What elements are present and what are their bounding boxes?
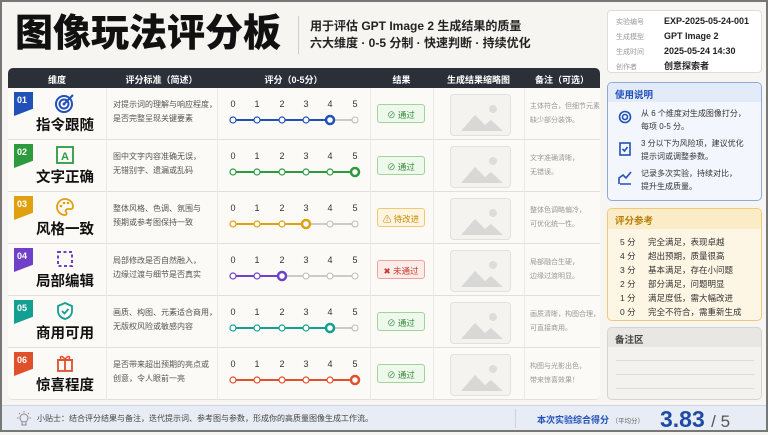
table header: 备注（可选） [535, 75, 589, 85]
row 2: 02 [17, 147, 27, 157]
panel: scoring reference: 4 分 [620, 251, 636, 261]
row 2: 无错误。 [530, 169, 558, 176]
panel: scoring reference: 2 分 [620, 279, 636, 289]
subtitle: 六大维度 · 0-5 分制 · 快速判断 · 持续优化 [310, 36, 531, 50]
title: 图像玩法评分板 [15, 13, 281, 55]
panel: usage: 3 分以下为风险项，建议优化 [641, 139, 744, 148]
row 6: 是否带来超出预期的亮点或 [113, 360, 209, 369]
panel: notes: 备注区 [615, 335, 644, 346]
row 4: 0 [230, 255, 236, 265]
row 4 [8, 244, 600, 296]
row 4: 5 [352, 255, 358, 265]
row 4: 边缘过渡与细节是否真实 [113, 270, 201, 279]
info box: 创意探索者 [664, 61, 709, 71]
info box: 实验编号 [616, 19, 644, 26]
row 5: 画质清晰，构图合理， [530, 311, 600, 318]
info box: 2025-05-24 14:30 [664, 46, 736, 56]
row 2: 图中文字内容准确无误， [113, 152, 201, 161]
row 3: 03 [17, 199, 27, 209]
row 2: ⊘ 通过 [387, 162, 415, 172]
info box: 生成时间 [616, 49, 644, 56]
row 1: 指令跟随 [36, 118, 94, 134]
row 4: 04 [17, 251, 27, 261]
row 4: 3 [303, 255, 309, 265]
row 6: 惊喜程度 [36, 378, 94, 394]
subtitle: 用于评估 GPT Image 2 生成结果的质量 [310, 19, 521, 33]
tip text: 小贴士：结合评分结果与备注，迭代提示词、参考图与参数，形成你的高质量图像生成工作流。 [37, 414, 373, 423]
row 2: 无错别字、遗漏或乱码 [113, 166, 193, 175]
row 1: 5 [352, 99, 358, 109]
panel: usage: 记录多次实验，持续对比， [641, 169, 737, 178]
row 3: 风格一致 [36, 222, 94, 238]
row 5: 可直接商用。 [530, 325, 572, 332]
panel: scoring reference: 完全满足，表现卓越 [648, 237, 725, 247]
row 6: 创意，令人眼前一亮 [113, 374, 185, 383]
table header: 评分（0-5分） [264, 75, 322, 85]
info box [607, 10, 762, 73]
panel: scoring reference: 3 分 [620, 265, 636, 275]
row 3: ⚠ 待改进 [383, 214, 419, 224]
row 6: 4 [327, 359, 333, 369]
row 4: 4 [327, 255, 333, 265]
table header: 维度 [48, 75, 66, 85]
row 5: 0 [230, 307, 236, 317]
icon: shield [57, 302, 73, 320]
row 6: 带来惊喜效果！ [530, 377, 579, 384]
icon: selection [57, 251, 73, 267]
table header: 结果 [392, 75, 410, 85]
row 4: ✖ 未通过 [384, 266, 418, 276]
row 5: 商用可用 [36, 326, 94, 342]
table header [8, 68, 600, 88]
row 1: 是否完整呈现关键要素 [113, 114, 193, 123]
info box: EXP-2025-05-24-001 [664, 16, 749, 26]
panel: scoring reference: 评分参考 [615, 216, 653, 227]
panel: usage: 每项 0-5 分。 [641, 122, 689, 130]
panel: usage: 从 6 个维度对生成图像打分， [641, 109, 746, 118]
row 1 [8, 88, 600, 140]
row 1: 缺少部分装饰。 [530, 117, 579, 124]
row 4: 局部融合生硬， [530, 259, 579, 266]
row 5: 5 [352, 307, 358, 317]
row 6: 构图与光影出色， [530, 363, 586, 370]
row 5 [8, 296, 600, 348]
row 3 [8, 192, 600, 244]
row 3: 2 [279, 203, 285, 213]
panel: scoring reference: 完全不符合，需重新生成 [648, 307, 742, 317]
row 4: 局部修改是否自然融入， [113, 256, 201, 265]
row 5: 05 [17, 303, 27, 313]
info box: 创作者 [616, 64, 637, 71]
row 3: 整体色调略偏冷， [530, 207, 586, 214]
panel: scoring reference [607, 208, 762, 321]
icon: bulb [17, 411, 31, 426]
row 1: 2 [279, 99, 285, 109]
panel: scoring reference: 1 分 [620, 293, 636, 303]
row 3: 3 [303, 203, 309, 213]
row 6: 2 [279, 359, 285, 369]
row 4: 局部编辑 [36, 274, 94, 290]
panel: notes [607, 327, 762, 400]
row 5: ⊘ 通过 [387, 318, 415, 328]
row 5: 画质、构图、元素适合商用， [113, 308, 217, 317]
panel: scoring reference: 基本满足，存在小问题 [648, 265, 733, 275]
row 3: 5 [352, 203, 358, 213]
row 1: 主体符合，但细节元素 [530, 103, 600, 110]
subtitle [310, 19, 531, 50]
row 4: 2 [279, 255, 285, 265]
row 2: 4 [327, 151, 333, 161]
icon: text: A [61, 151, 69, 163]
panel: scoring reference: 5 分 [620, 237, 636, 247]
table header: 评分标准（简述） [125, 75, 198, 85]
row 2: 文字准确清晰， [530, 155, 579, 162]
row 1: 4 [327, 99, 333, 109]
row 1: 1 [254, 99, 260, 109]
row 6: 5 [352, 359, 358, 369]
row 3: 0 [230, 203, 236, 213]
row 5: 1 [254, 307, 260, 317]
row 2: 3 [303, 151, 309, 161]
row 1: ⊘ 通过 [387, 110, 415, 120]
footer bar [2, 405, 766, 430]
row 3: 预期或参考图保持一致 [113, 218, 193, 227]
row 6: 06 [17, 355, 27, 365]
row 5: 无版权风险或敏感内容 [113, 322, 193, 331]
row 3: 4 [327, 203, 333, 213]
row 3: 整体风格、色调、氛围与 [113, 204, 201, 213]
row 2: 文字正确 [36, 170, 94, 186]
row 4: 边缘过渡明显。 [530, 273, 579, 280]
panel: scoring reference: 超出预期，质量很高 [648, 251, 725, 261]
icon: gift [57, 356, 73, 372]
row 5: 4 [327, 307, 333, 317]
row 2: 1 [254, 151, 260, 161]
row 3: 1 [254, 203, 260, 213]
info box: 生成模型 [616, 34, 644, 41]
panel: scoring reference: 部分满足，问题明显 [648, 279, 725, 289]
row 5: 2 [279, 307, 285, 317]
panel: usage: 提示词或调整参数。 [641, 152, 713, 160]
row 6 [8, 348, 600, 400]
panel: usage: 使用说明 [615, 90, 653, 101]
row 3: 可优化统一性。 [530, 221, 579, 228]
total score: 本次实验综合得分 （平均分） [537, 415, 644, 425]
row 1: 对提示词的理解与响应程度， [113, 100, 217, 109]
panel: scoring reference: 满足度低，需大幅改进 [648, 293, 733, 303]
row 2: 2 [279, 151, 285, 161]
footer bar: 3.83 / 5 [660, 406, 730, 432]
table header: 生成结果缩略图 [447, 75, 510, 85]
row 6: ⊘ 通过 [387, 370, 415, 380]
row 1: 3 [303, 99, 309, 109]
row 2: 0 [230, 151, 236, 161]
row 1: 01 [17, 95, 27, 105]
panel: usage [607, 82, 762, 201]
icon: text [56, 146, 74, 164]
row 6: 3 [303, 359, 309, 369]
info box: GPT Image 2 [664, 31, 719, 41]
row 1: 0 [230, 99, 236, 109]
panel: usage: 提升生成质量。 [641, 182, 697, 190]
row 4: 1 [254, 255, 260, 265]
icon: target [55, 94, 74, 113]
row 6: 0 [230, 359, 236, 369]
icon: palette [56, 198, 74, 216]
panel: scoring reference: 0 分 [620, 307, 636, 317]
row 2 [8, 140, 600, 192]
row 2: 5 [352, 151, 358, 161]
row 6: 1 [254, 359, 260, 369]
row 5: 3 [303, 307, 309, 317]
